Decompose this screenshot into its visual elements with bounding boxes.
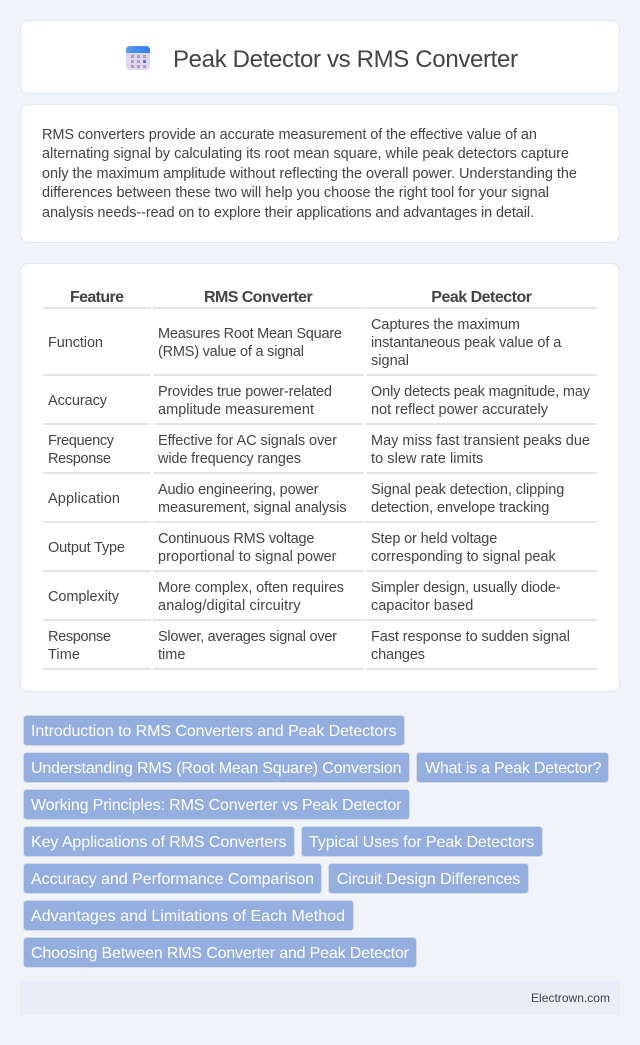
tag: Working Principles: RMS Converter vs Peak Detector — [31, 797, 402, 814]
row: function: Measures Root Mean Square — [158, 326, 342, 342]
row: output type: proportional to signal power — [158, 549, 337, 565]
row: response time: Slower, averages signal over — [158, 629, 337, 645]
row: function: (RMS) value of a signal — [158, 344, 304, 360]
tag: What is a Peak Detector? — [425, 760, 602, 777]
tag — [24, 900, 354, 930]
row: function — [48, 317, 562, 369]
tag — [24, 826, 294, 856]
intro text panel — [20, 104, 620, 242]
row: accuracy: Only detects peak magnitude, may — [371, 384, 591, 400]
row: complexity: analog/digital circuitry — [158, 598, 301, 614]
tag: Typical Uses for Peak Detectors — [309, 834, 534, 851]
row: function: signal — [371, 353, 409, 369]
intro paragraph: analysis needs--read on to explore their applications and advantages in detail. — [42, 205, 534, 221]
row: application: detection, envelope tracking — [371, 500, 549, 516]
tag — [24, 938, 416, 968]
row: accuracy — [48, 384, 591, 418]
footer — [20, 981, 620, 1015]
intro paragraph: only the maximum amplitude without reflecting the overall power. Understanding the — [42, 166, 577, 182]
comparison table panel — [20, 264, 620, 692]
row: frequency response: to slew rate limits — [371, 451, 483, 467]
topic tags — [24, 716, 608, 968]
tag — [328, 864, 528, 894]
row: application: Audio engineering, power — [158, 482, 319, 498]
row: output type: Continuous RMS voltage — [158, 531, 314, 547]
table header: Peak Detector — [431, 289, 532, 306]
row: frequency response: Effective for AC signals over — [158, 433, 337, 449]
row: application: Application — [48, 491, 120, 507]
table header: Feature — [70, 289, 124, 306]
intro paragraph: RMS converters provide an accurate measurement of the effective value of an — [42, 127, 537, 143]
row: accuracy: Accuracy — [48, 393, 108, 409]
row: application: Signal peak detection, clipping — [371, 482, 564, 498]
tag — [24, 752, 410, 782]
tag: Choosing Between RMS Converter and Peak Detector — [31, 945, 410, 962]
tag: Advantages and Limitations of Each Method — [31, 908, 345, 925]
intro paragraph — [42, 127, 577, 221]
row: complexity: More complex, often requires — [158, 580, 344, 596]
row: accuracy: not reflect power accurately — [371, 402, 549, 418]
tag — [24, 864, 322, 894]
row: complexity: capacitor based — [371, 598, 473, 614]
intro paragraph: differences between these two will help you choose the right tool for your signal — [42, 185, 549, 201]
row: response time: Fast response to sudden signal — [371, 629, 570, 645]
footer source: Electrown.com — [531, 991, 610, 1005]
header card — [20, 20, 620, 94]
row: complexity: Simpler design, usually diode- — [371, 580, 561, 596]
row: output type: Step or held voltage — [371, 531, 497, 547]
row: response time: Response — [48, 629, 111, 645]
icon: calendar — [126, 46, 150, 70]
row: output type: Output Type — [48, 540, 125, 556]
tag: Key Applications of RMS Converters — [31, 834, 286, 851]
row: output type: corresponding to signal peak — [371, 549, 556, 565]
row: function: Captures the maximum — [371, 317, 520, 333]
row: response time: Time — [48, 647, 80, 663]
tag: Introduction to RMS Converters and Peak Detectors — [31, 723, 396, 740]
row: complexity: Complexity — [48, 589, 120, 605]
tag — [302, 826, 542, 856]
row: accuracy: amplitude measurement — [158, 402, 314, 418]
row: application: measurement, signal analysis — [158, 500, 346, 516]
row: frequency response: May miss fast transient peaks due — [371, 433, 590, 449]
tag: Understanding RMS (Root Mean Square) Conversion — [31, 760, 402, 777]
row: response time — [48, 629, 570, 663]
row: frequency response — [48, 433, 590, 467]
row: frequency response: wide frequency ranges — [157, 451, 301, 467]
row: frequency response: Response — [48, 451, 111, 467]
tag: Circuit Design Differences — [337, 871, 520, 888]
tag — [24, 716, 404, 746]
title: Peak Detector vs RMS Converter — [173, 46, 518, 73]
row: complexity — [48, 580, 561, 614]
tag — [24, 790, 410, 820]
row: output type — [48, 531, 556, 565]
intro paragraph: alternating signal by calculating its root mean square, while peak detectors capture — [42, 146, 569, 162]
row: function: instantaneous peak value of a — [371, 335, 562, 351]
row: accuracy: Provides true power-related — [158, 384, 332, 400]
row: frequency response: Frequency — [48, 433, 115, 449]
table header — [70, 289, 532, 306]
row: response time: time — [158, 647, 186, 663]
row: application — [48, 482, 564, 516]
table header: RMS Converter — [204, 289, 313, 306]
tag — [416, 752, 608, 782]
tag: Accuracy and Performance Comparison — [31, 871, 314, 888]
row: function: Function — [48, 335, 103, 351]
row: response time: changes — [371, 647, 425, 663]
